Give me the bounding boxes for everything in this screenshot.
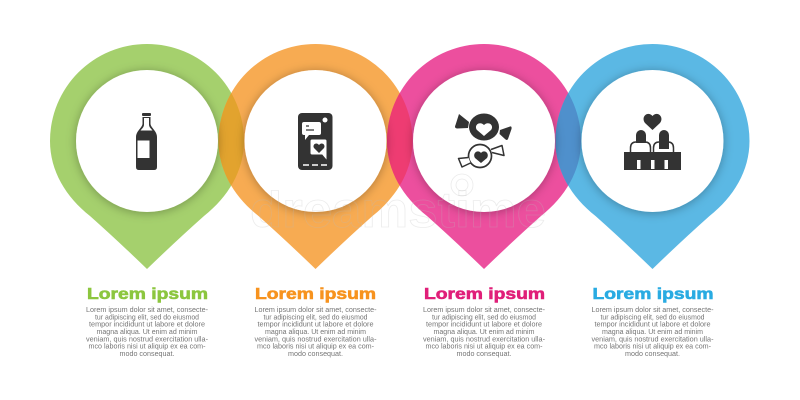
text block: pink: Lorem ipsum dolor sit amet, consecte- <box>423 307 546 314</box>
text block: pink <box>423 307 546 358</box>
icon: bottle <box>136 113 157 170</box>
white circle: green pin <box>76 70 218 212</box>
text block: orange: modo consequat. <box>288 351 343 358</box>
text block: green: veniam, quis nostrud exercitation ulla- <box>86 336 209 343</box>
overlap: green and orange <box>218 93 244 186</box>
text block: pink: tempor incididunt ut labore et dolore <box>426 322 542 329</box>
white circle: blue pin <box>582 70 724 212</box>
pin: green <box>50 44 244 269</box>
text block: blue: tur adipiscing elit, sed do eiusmod <box>600 314 705 321</box>
text block: pink: tur adipiscing elit, sed do eiusmod <box>432 314 536 321</box>
heading: green: Lorem ipsum <box>87 286 208 303</box>
pin: pink <box>387 44 581 269</box>
icon: couple at table with heart <box>624 114 681 170</box>
text block: pink: mco laboris nisi ut aliquip ex ea com- <box>426 344 543 351</box>
text block: blue: Lorem ipsum dolor sit amet, consecte- <box>592 307 714 314</box>
text block: orange: veniam, quis nostrud exercitation ulla- <box>254 336 377 343</box>
text block: orange: tempor incididunt ut labore et dolore <box>258 322 374 329</box>
icon: candies with hearts <box>455 114 512 168</box>
heading: blue: Lorem ipsum <box>592 286 714 303</box>
text block: blue: tempor incididunt ut labore et dolore <box>594 322 711 329</box>
text block: blue <box>592 307 714 358</box>
text block: green: tur adipiscing elit, sed do eiusmod <box>95 314 199 321</box>
text block: orange <box>254 307 377 358</box>
pin: orange <box>218 44 412 269</box>
icon: phone with chat bubbles <box>298 113 332 170</box>
text block: green: tempor incididunt ut labore et dolore <box>89 322 205 329</box>
text block: green <box>86 307 209 358</box>
text block: orange: tur adipiscing elit, sed do eiusmod <box>264 314 368 321</box>
watermark: dreamstime <box>250 182 546 238</box>
text block: orange: magna aliqua. Ut enim ad minim <box>265 329 366 336</box>
overlap: orange and pink <box>387 93 412 186</box>
heading: pink: Lorem ipsum <box>424 286 545 303</box>
text block: blue: veniam, quis nostrud exercitation ulla- <box>592 336 714 343</box>
text block: green: modo consequat. <box>120 351 175 358</box>
text block: orange: Lorem ipsum dolor sit amet, consecte- <box>254 307 377 314</box>
text block: green: magna aliqua. Ut enim ad minim <box>96 329 198 336</box>
pin: blue <box>556 44 750 269</box>
text block: pink: veniam, quis nostrud exercitation ulla- <box>423 336 546 343</box>
text block: pink: magna aliqua. Ut enim ad minim <box>434 329 535 336</box>
text block: blue: magna aliqua. Ut enim ad minim <box>602 329 703 336</box>
text block: green: mco laboris nisi ut aliquip ex ea com- <box>88 344 206 351</box>
text block: pink: modo consequat. <box>456 351 512 358</box>
text block: blue: mco laboris nisi ut aliquip ex ea com- <box>594 344 712 351</box>
white circle: pink pin <box>413 70 555 212</box>
white circle: orange pin <box>244 70 386 212</box>
text block: green: Lorem ipsum dolor sit amet, consecte- <box>86 307 209 314</box>
heading: orange: Lorem ipsum <box>255 286 376 303</box>
overlap: pink and blue <box>556 93 581 186</box>
text block: blue: modo consequat. <box>625 351 680 358</box>
text block: orange: mco laboris nisi ut aliquip ex ea com- <box>257 344 375 351</box>
